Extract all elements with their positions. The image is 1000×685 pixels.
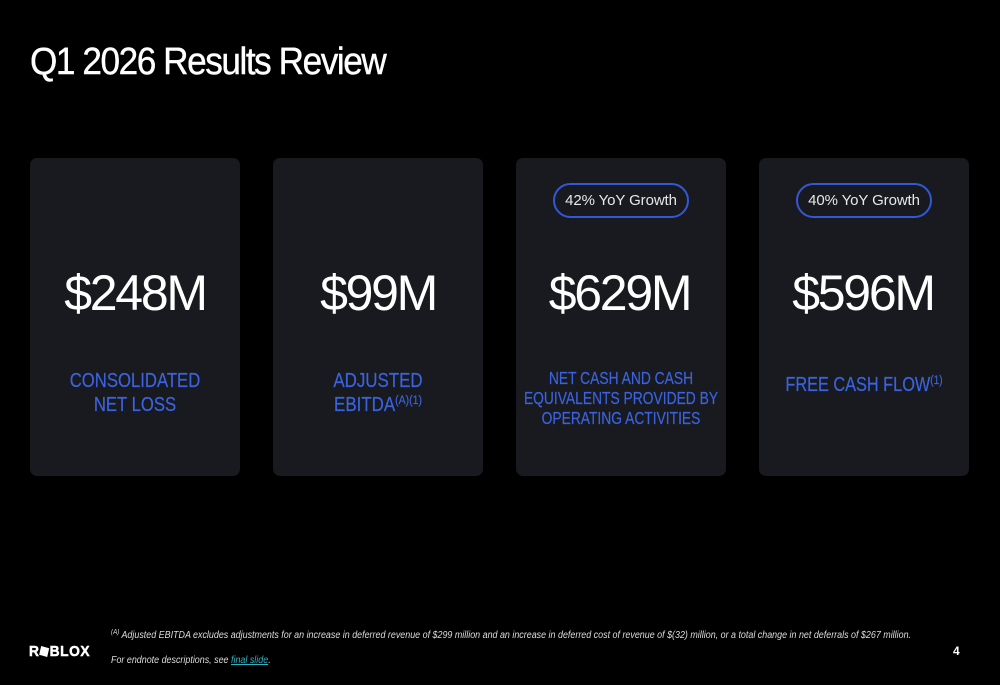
badge: 42% growth [553, 183, 689, 218]
value: net loss: $248M [64, 265, 206, 321]
panel: adjusted EBITDA [273, 158, 483, 476]
label: adjusted EBITDA: EBITDA(A)(1) [334, 393, 422, 416]
value: free cash flow: $596M [792, 265, 934, 321]
label: adjusted EBITDA [333, 370, 423, 416]
label: free cash flow: FREE CASH FLOW(1) [785, 373, 943, 396]
footnote: adjusted EBITDA: (A) Adjusted EBITDA excludes adjustments for an increase in deferred revenue of $299 million and an increase in deferred cost of revenue of $(32) million, or a total change in net deferrals of $267 million. [111, 629, 911, 641]
label: net cash [524, 368, 718, 428]
label: net cash: OPERATING ACTIVITIES [542, 408, 700, 428]
footnote: endnote reference: For endnote descriptions, see final slide. [111, 655, 271, 666]
value: adjusted EBITDA: $99M [320, 265, 436, 321]
panel: consolidated net loss [30, 158, 240, 476]
badge: 42% growth: 42% YoY Growth [565, 192, 677, 209]
label: adjusted EBITDA: ADJUSTED [333, 370, 423, 392]
panel: free cash flow [759, 158, 969, 476]
badge: 40% growth [796, 183, 932, 218]
logo: Roblox: R BLOX [29, 643, 90, 660]
label: net loss [70, 370, 200, 416]
panel: net cash from operations [516, 158, 726, 476]
page number: 4 [953, 644, 960, 658]
label: net cash: NET CASH AND CASH [549, 368, 693, 388]
label: net cash: EQUIVALENTS PROVIDED BY [524, 388, 718, 408]
title: Q1 2026 Results Review [30, 41, 385, 83]
label: net loss: CONSOLIDATED [70, 370, 200, 392]
value: net cash: $629M [549, 265, 690, 321]
badge: 40% growth: 40% YoY Growth [808, 192, 920, 209]
label: net loss: NET LOSS [94, 394, 176, 416]
